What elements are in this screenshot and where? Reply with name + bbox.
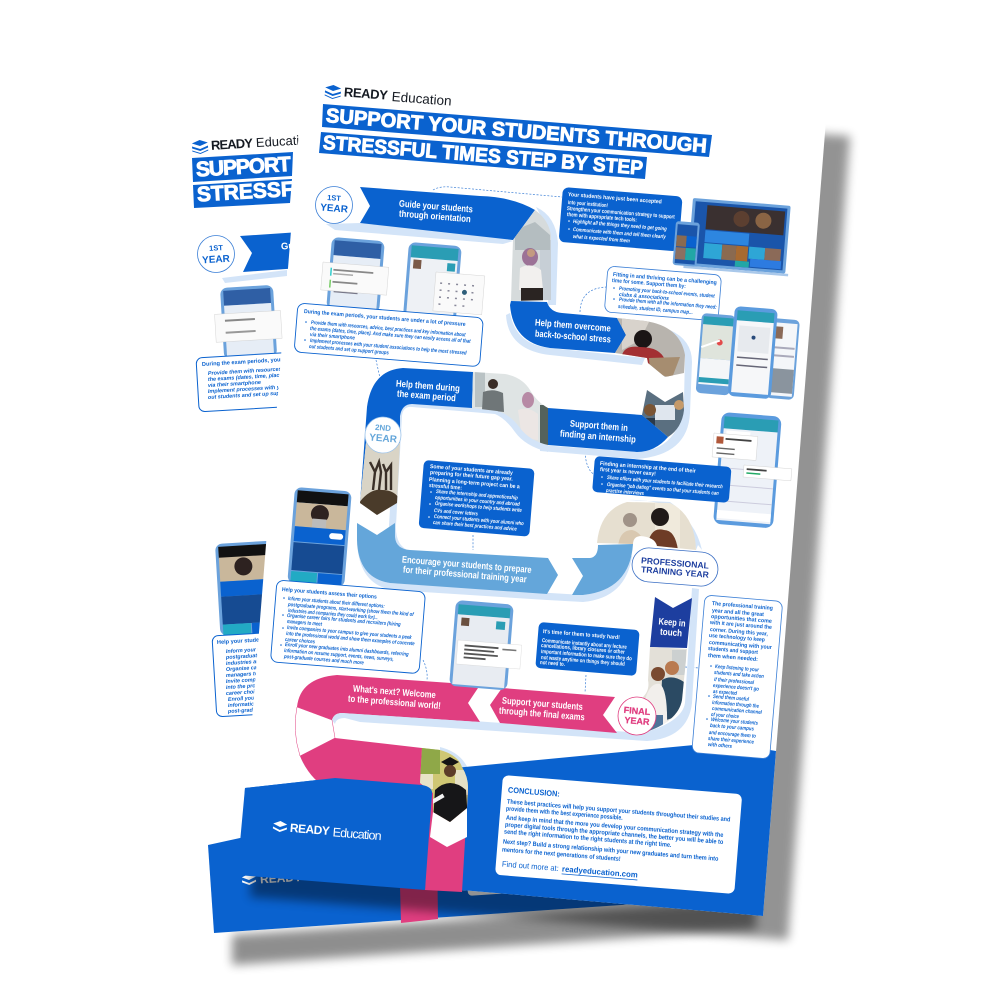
final year badge — [618, 697, 656, 735]
bottom blue band — [240, 745, 776, 916]
back bottom band — [208, 805, 738, 933]
back pink column — [399, 848, 438, 923]
panel: assess options: Invite companies to your campus to give your students a peek — [287, 625, 413, 641]
back logo: READY — [211, 135, 254, 153]
panel: study hard — [535, 622, 640, 676]
listing card — [712, 433, 758, 460]
panel: gap year: Share the internship and apprenticeship — [436, 489, 519, 502]
panel: professional training year — [692, 595, 783, 759]
back poster shadow — [232, 899, 756, 965]
panel: professional training year: them when needed: — [708, 653, 758, 663]
photo: hikers on rock — [360, 442, 400, 515]
panel: assess options: managers to meet — [287, 619, 322, 628]
final year badge: FINAL — [623, 705, 651, 717]
panel: gap year: preparing for their future gap year. — [430, 470, 513, 483]
panel: professional training year: opportunities that come — [711, 614, 772, 625]
panel: professional training year: communicating with your — [709, 640, 773, 651]
logo — [324, 83, 452, 109]
panel: fitting in: Promoting your back-to-school events, student — [619, 286, 715, 300]
panel: fitting in: time for some. Support them by: — [612, 278, 686, 290]
white chevron — [430, 808, 467, 847]
text: what's next: to the professional world! — [348, 694, 441, 712]
text: guide: through orientation — [399, 209, 471, 225]
panel: professional training year: share their experience — [708, 736, 754, 746]
panel: conclusion: send the right information to the right students at the right time. — [504, 829, 672, 849]
panel: fitting in: schedule, student ID, campus map... — [618, 304, 693, 316]
panel: professional training year: experience doesn't go — [713, 683, 760, 693]
ribbon: keep in touch — [650, 597, 692, 648]
panel: finding an internship — [592, 456, 732, 503]
phone: alumni dashboard — [287, 487, 352, 587]
text: keep — [658, 616, 686, 639]
photo: graduate — [420, 748, 468, 822]
panel: study hard: important information to make sure they do — [541, 649, 632, 662]
panel: conclusion: provide them with the best experience possible. — [506, 806, 623, 822]
text: exam — [396, 379, 460, 404]
text: final exams: Support your students — [502, 696, 583, 713]
phone: calendar — [403, 242, 485, 321]
panel: fitting in: clubs & associations — [619, 292, 669, 302]
text: encourage: for their professional training year — [403, 565, 527, 585]
laptop mockup — [672, 198, 794, 276]
panel: exam periods: Implement processes with your student associations to help the most stressed — [310, 338, 467, 357]
professional training year pill: TRAINING YEAR — [641, 564, 710, 580]
phone: job listings — [712, 412, 792, 528]
back panel options: into the professional — [226, 682, 280, 691]
panel: professional training year: year and all the great — [712, 608, 764, 618]
panel: exam periods: via their smartphone — [310, 332, 355, 342]
logo: Education — [391, 89, 452, 109]
panel: study hard: cancellations, library closures or other — [541, 643, 626, 656]
inner light strip — [332, 713, 480, 727]
back title — [192, 152, 322, 208]
back panel exams: Implement processes with your — [208, 384, 290, 395]
panel: professional training year: corner. During this year, — [710, 627, 768, 638]
phone: schedule — [321, 237, 389, 313]
back phone 1 — [213, 285, 283, 360]
panel: professional training year: The professional training — [712, 601, 774, 612]
panel: professional training year: and encourage them to — [709, 730, 757, 740]
card logo: READY — [289, 821, 330, 838]
ribbon: exam period — [360, 368, 473, 503]
panel: conclusion: Find out more at: — [502, 860, 559, 873]
text: overcome — [535, 318, 611, 346]
back panel exams: out students and set up support — [208, 390, 291, 401]
card with logo — [237, 778, 432, 890]
panel: professional training year: students and support — [708, 646, 758, 656]
text: overcome: Help them overcome — [535, 318, 611, 335]
title: SUPPORT YOUR STUDENTS THROUGH — [325, 105, 708, 158]
back poster — [165, 100, 738, 933]
lower pink curve — [300, 738, 434, 795]
back title: STRESSFUL — [196, 176, 322, 206]
panel: fitting in — [604, 266, 722, 321]
back logo — [192, 132, 314, 154]
back logo: Education — [255, 132, 314, 150]
final year badge: YEAR — [624, 715, 650, 727]
photo: mentor conversation — [597, 502, 696, 550]
title: STRESSFUL TIMES STEP BY STEP — [322, 132, 644, 180]
text: exam: the exam period — [397, 389, 456, 404]
first year badge: 1ST — [327, 193, 342, 203]
panel: assess options: Enroll your new graduates into alumni dashboards, referring — [285, 642, 409, 658]
back panel options: Invite companies — [226, 676, 270, 685]
back panel options: post-graduate — [227, 707, 264, 715]
panel: study hard: not waste anytime on things they should — [541, 655, 625, 668]
panel: professional training year: with it are just around the — [709, 620, 772, 631]
panel: professional training year: use technology to keep — [709, 633, 766, 644]
ribbon: overcome stress — [510, 301, 626, 353]
back panel exams: During the exam periods, your students — [202, 356, 308, 368]
panel: accepted: Communicate with them and tell them clearly — [573, 227, 667, 241]
panel: gap year: Planning a long-term project can be a — [429, 477, 521, 490]
panel: finding an internship: Finding an internship at the end of their — [600, 461, 697, 475]
panel: professional training year: if their professional — [714, 677, 755, 686]
panel: assess options: information on resume support, events, news, surveys, — [284, 648, 394, 663]
panel: professional training year: information through the — [712, 700, 759, 710]
back first year band: YEAR — [202, 254, 231, 266]
panel: gap year — [419, 460, 535, 537]
pink column — [425, 790, 468, 892]
back panel exams: via their smartphone — [208, 380, 261, 389]
panel: study hard: Communicate instantly about any lecture — [542, 638, 627, 651]
second year badge: YEAR — [369, 432, 398, 446]
photo: group of graduates — [643, 647, 687, 731]
photo: internship meeting — [642, 390, 684, 437]
panel: professional training year: Keep listening to your — [715, 664, 760, 674]
panel: fitting in: Fitting in and thriving can be a challenging — [613, 272, 717, 286]
notification card — [456, 640, 522, 669]
panel: assess options — [270, 580, 426, 674]
text: what's next: What's next? Welcome — [353, 684, 436, 701]
panel: exam periods: Provide them with resources, advice, best practices and key information about — [311, 320, 466, 338]
photo: stressed woman at laptop — [615, 318, 685, 377]
back panel options — [212, 629, 327, 717]
back conclusion card — [466, 856, 618, 896]
card logo — [272, 819, 382, 843]
connectors — [376, 187, 700, 693]
panel: finding an internship: Share offers with your students to facilitate their research — [607, 475, 723, 490]
phones: map, calendar, id — [696, 306, 800, 400]
back panel exams — [196, 351, 319, 412]
panel: gap year: Connect your students with your alumni who — [434, 514, 524, 527]
text: exam: Help them during — [396, 379, 460, 395]
panel: finding an internship: practise interviews — [605, 488, 644, 497]
panel: assess options: into the professional world and show them examples of concrete — [286, 631, 415, 647]
panel: accepted: Highlight all the things they need to get going — [573, 219, 668, 233]
text: guide: Guide your students — [399, 199, 473, 215]
back panel exams: Provide them with resources, advice — [208, 365, 301, 377]
panel: professional training year: students and take action — [714, 670, 765, 680]
first year badge: YEAR — [320, 202, 349, 216]
first year badge — [316, 186, 352, 224]
panel: professional training year: of your choice — [711, 712, 739, 720]
panel: professional training year: as expected — [713, 689, 738, 697]
second year badge — [365, 417, 401, 453]
text: final exams: through the final exams — [499, 706, 585, 723]
card logo: Education — [332, 825, 382, 843]
panel: assess options: Inform your students about their different options: — [288, 596, 385, 610]
photo: hijab student — [511, 210, 551, 301]
panel: accepted: into your institution! — [568, 200, 608, 209]
panel: finding an internship: first year is never easy! — [600, 467, 656, 477]
text: internship: finding an internship — [560, 429, 636, 446]
text: overcome: back-to-school stress — [535, 329, 611, 346]
panel: exam periods — [294, 303, 483, 367]
panel: professional training year: with others — [708, 742, 732, 750]
panel: study hard: not need to. — [540, 660, 566, 668]
filter card — [743, 465, 792, 481]
ribbon shadows — [300, 207, 702, 810]
panel: gap year: opportunities in your country and abroad — [435, 495, 521, 508]
text: final exams — [499, 696, 585, 723]
panel: study hard: It's time for them to study hard! — [543, 629, 620, 641]
back panel options: career choices — [226, 689, 264, 697]
back panel options: Organise career — [226, 665, 268, 673]
panel: exam periods: During the exam periods, your students are under a lot of pressure — [304, 309, 466, 328]
panel: professional training year: communication channel — [712, 706, 762, 716]
panel: fitting in: Provide them with all the information they need: — [619, 297, 717, 311]
back first year band: 1ST — [209, 243, 224, 253]
text: encourage: Encourage your students to prepare — [402, 555, 532, 576]
panel: conclusion: mentors for the next generations of students! — [502, 847, 621, 863]
panel: accepted: what is expected from them — [573, 234, 630, 245]
ribbon: support internship — [548, 408, 668, 452]
front poster sheet — [240, 80, 826, 916]
panel: gap year: CVs and cover letters — [434, 508, 478, 518]
back panel exams: the exams (dates, time, place)... — [208, 372, 289, 383]
panel: assess options: post-graduate courses and much more — [283, 654, 364, 666]
professional training year pill: PROFESSIONAL — [641, 555, 709, 571]
back panel options: Help your students assess — [217, 636, 288, 646]
panel: conclusion: Next step? Build a strong relationship with your new graduates and turn them into — [503, 839, 719, 863]
professional training year pill — [631, 547, 719, 587]
text: internship: Support them in — [570, 419, 628, 434]
back panel options: Enroll your new — [228, 695, 269, 703]
ribbon: encourage — [357, 523, 633, 595]
panel: assess options: postgraduate programs, start-working (show them the kind of — [287, 602, 415, 618]
panel: gap year: stressful time: — [429, 483, 462, 492]
text: guide — [399, 199, 473, 225]
panel: professional training year: Welcome your students — [711, 717, 758, 727]
back panel options: managers to — [226, 671, 259, 679]
text: what's next — [348, 684, 441, 712]
calendar card — [433, 272, 485, 315]
back panel options: Inform your students — [226, 646, 280, 655]
panel: conclusion: These best practices will help you support your students throughout their studies and — [507, 799, 731, 823]
panel: conclusion: CONCLUSION: — [508, 786, 560, 799]
panel: assess options: industries and companies they could work for)... — [288, 608, 378, 621]
ribbon: final exams — [490, 688, 617, 733]
back first year band — [198, 232, 308, 283]
ribbon: guide through orientation — [360, 187, 535, 240]
panel: exam periods: the exams (dates, time, place). And make sure they can easily access all of that — [310, 326, 471, 345]
panel: gap year: Some of your students are already — [430, 464, 514, 477]
title — [319, 104, 712, 180]
text: keep: touch — [660, 627, 683, 639]
panel: professional training year: back to your campus — [710, 723, 754, 733]
front poster shadow — [250, 100, 850, 940]
panel: finding an internship: Organise "job dating" events so that your students can — [607, 482, 719, 497]
panel: gap year: Organise workshops to help students write — [435, 501, 522, 514]
logo: READY — [343, 84, 389, 103]
back phone 2 — [215, 541, 278, 636]
back logo ghost: READY — [260, 870, 302, 886]
back first year band: Guide — [281, 240, 308, 252]
photo: students walking — [472, 372, 548, 445]
back title: SUPPORT — [195, 153, 292, 181]
text: internship — [560, 419, 636, 446]
panel: accepted — [559, 187, 683, 251]
schedule card — [321, 262, 389, 295]
panel: accepted: Your students have just been accepted — [568, 192, 662, 206]
back panel options: industries and — [226, 659, 264, 667]
panel: assess options: Organise career fairs for students and recruiters (hiring — [287, 613, 401, 628]
text: keep: Keep in — [658, 616, 686, 630]
panel: accepted: Strengthen your communication strategy to support — [567, 206, 675, 221]
text: encourage — [402, 555, 532, 585]
panel: gap year: can share their best practices and advice — [433, 520, 517, 533]
panel: accepted: them with appropriate tech tools: — [567, 212, 637, 224]
panel: assess options: career choices — [285, 637, 315, 645]
panel: conclusion: And keep in mind that the more you develop your communication strategy with the — [506, 815, 724, 839]
back panel options: postgraduate programs — [225, 651, 287, 661]
panel: conclusion: readyeducation.com — [562, 865, 638, 880]
back logo ghost — [242, 870, 302, 887]
ribbon: professional world — [295, 675, 480, 795]
panel: assess options: Help your students assess their options — [282, 587, 377, 601]
second year badge: 2ND — [375, 423, 392, 433]
panel: conclusion: proper digital tools through the appropriate channels, the better you will be able to — [505, 822, 724, 846]
white curve chevron — [295, 707, 335, 756]
panel: professional training year: Send them useful — [713, 694, 750, 703]
phone: lecture cancelled — [449, 600, 522, 690]
back panel options: information on — [228, 701, 267, 709]
panel: conclusion — [495, 775, 742, 894]
panel: exam periods: out students and set up support groups — [309, 344, 389, 356]
